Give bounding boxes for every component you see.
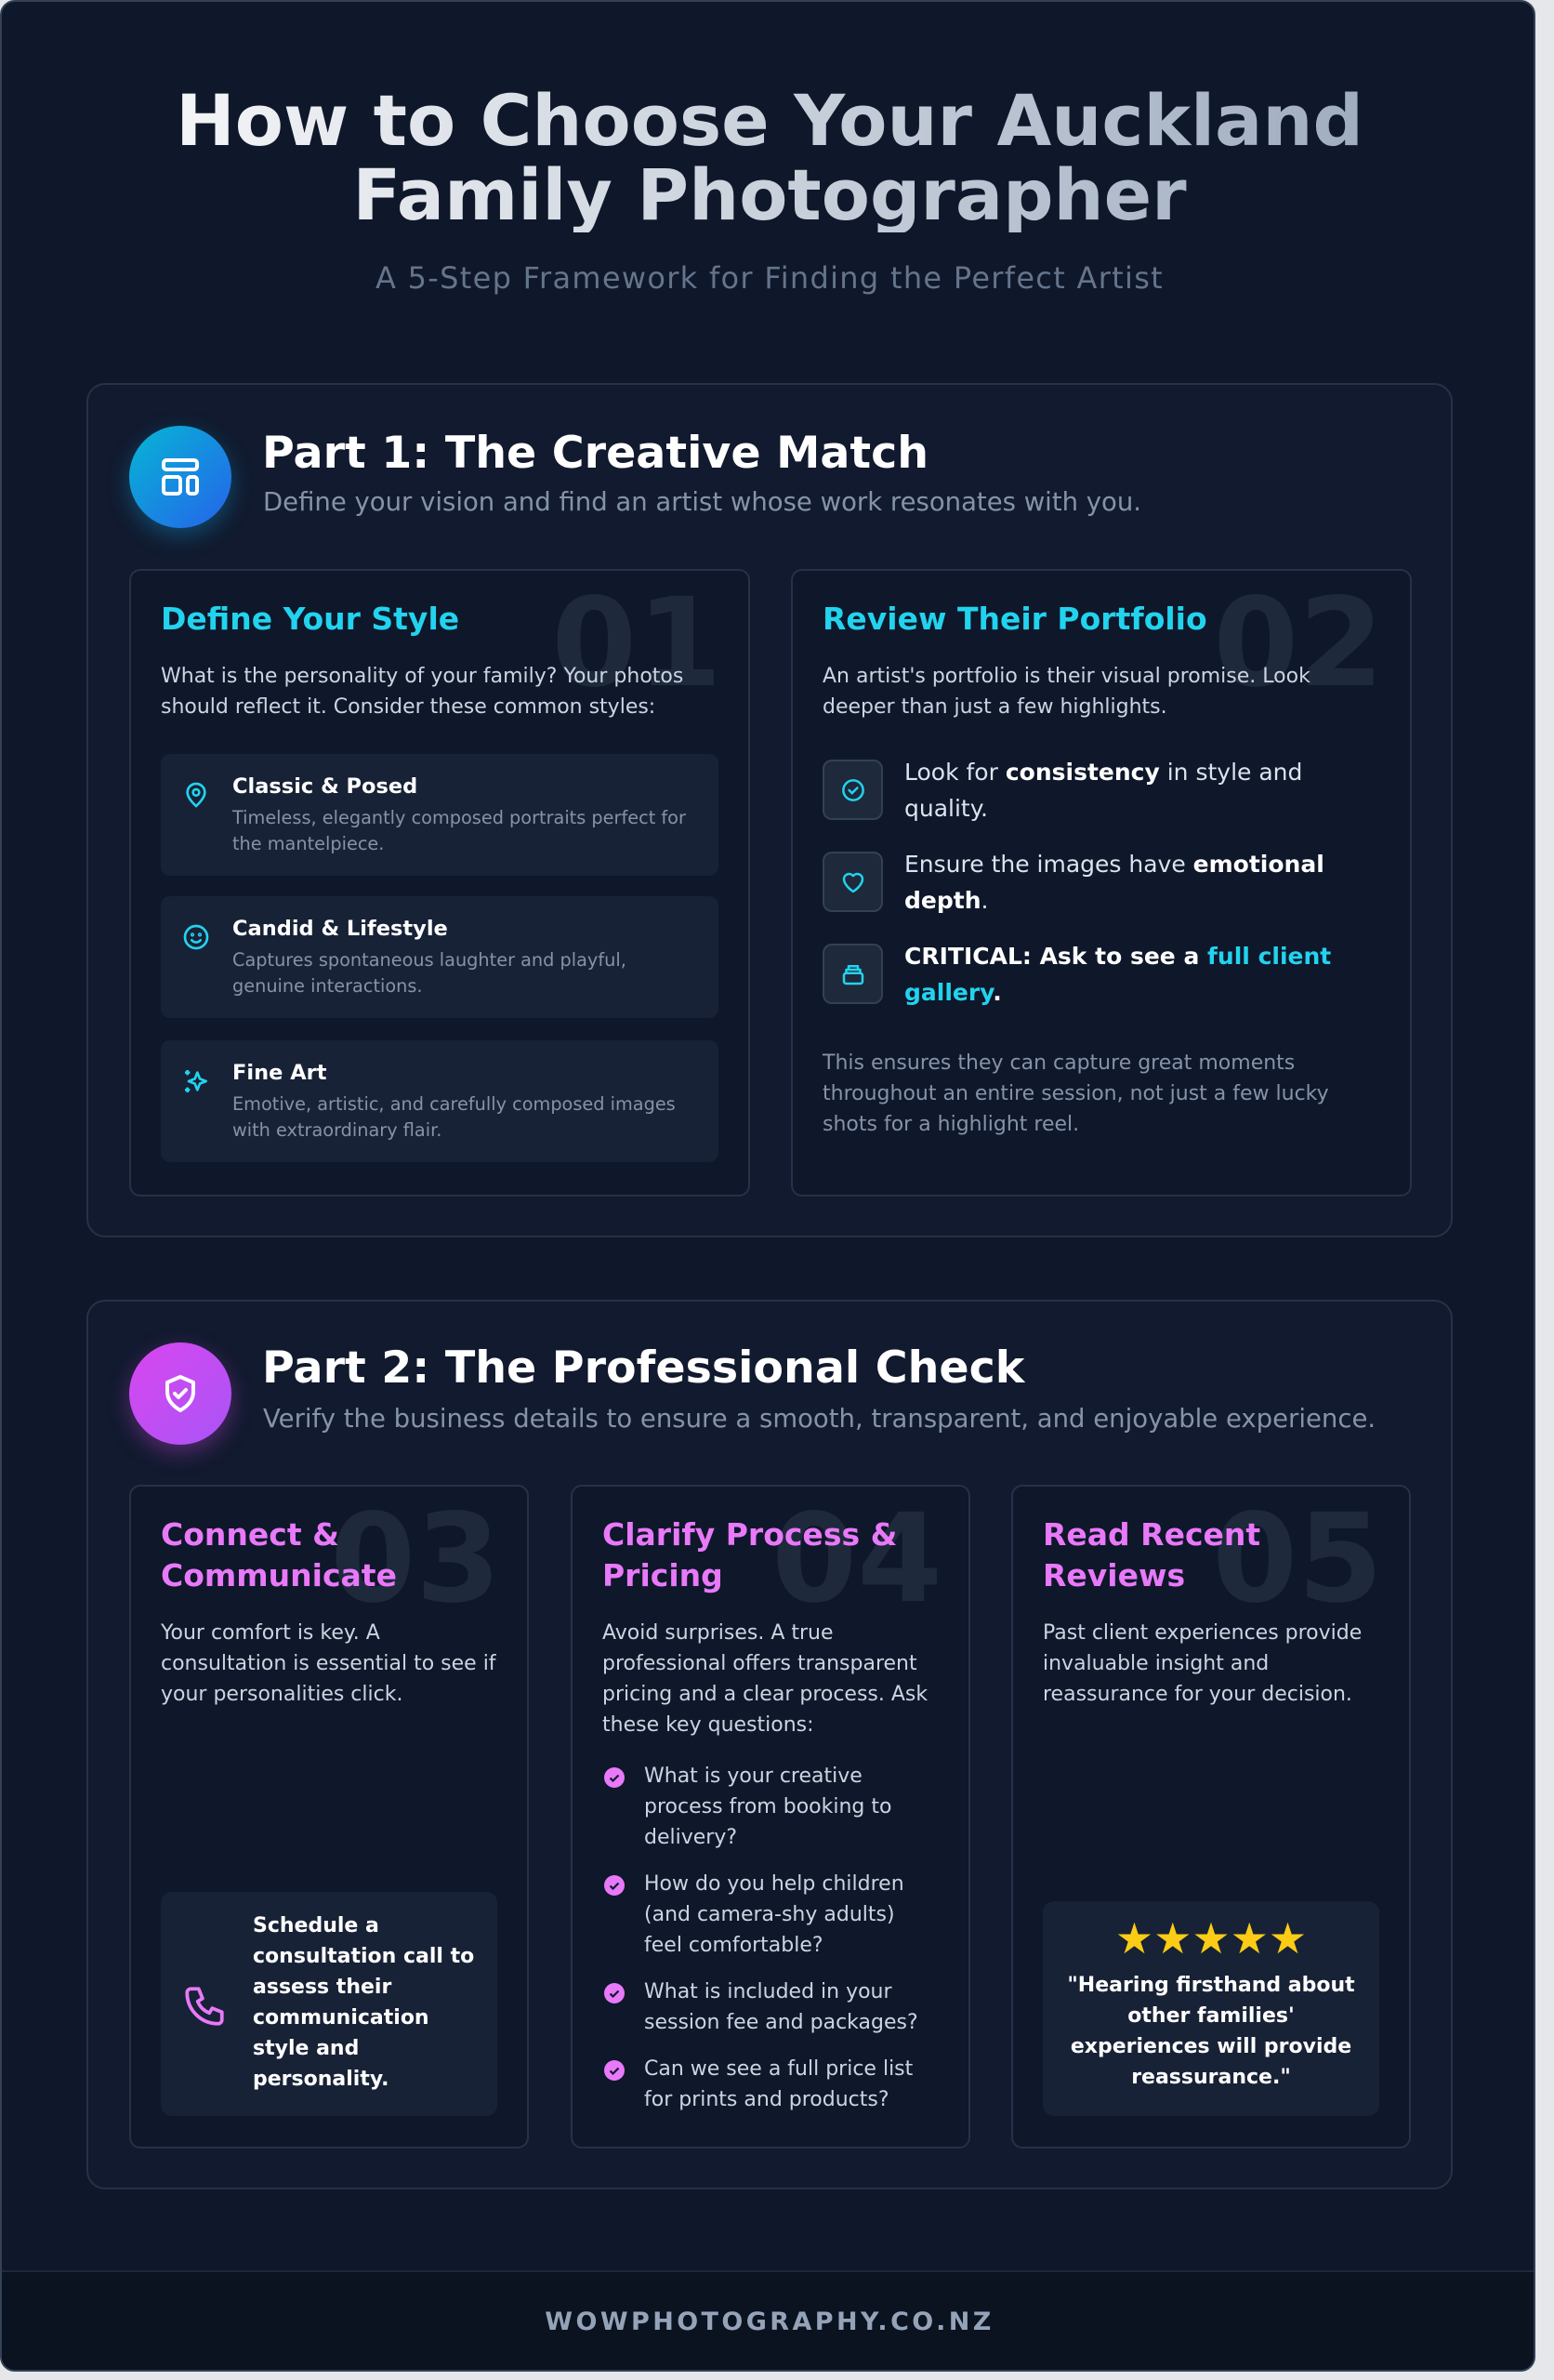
- card text: pricing and a clear process. Ask: [602, 1683, 928, 1706]
- icon: layout: [129, 426, 231, 528]
- card title: Define Your Style: [161, 601, 459, 637]
- heading: part 2: Part 2: The Professional Check: [262, 1342, 1024, 1394]
- row: consistency: quality.: [904, 795, 988, 822]
- card text: your personalities click.: [161, 1683, 402, 1706]
- question list: What is your creative: [644, 1765, 863, 1788]
- card: review portfolio: [791, 569, 1412, 1197]
- card title: Reviews: [1043, 1557, 1185, 1593]
- number 03: 03: [330, 1488, 501, 1631]
- card text: reassurance for your decision.: [1043, 1683, 1352, 1706]
- card title: Pricing: [602, 1557, 723, 1593]
- callout: testimonial: other families': [1127, 2004, 1295, 2028]
- number 05: 05: [1212, 1488, 1383, 1631]
- card title: Clarify Process &: [602, 1516, 897, 1553]
- question list: session fee and packages?: [644, 2011, 918, 2034]
- row: full gallery: gallery.: [904, 979, 1002, 1006]
- row: emotional depth: depth.: [904, 887, 988, 914]
- panel: part 1: [86, 383, 1453, 1237]
- callout: schedule: personality.: [253, 2068, 389, 2091]
- callout: schedule: communication: [253, 2006, 429, 2030]
- callout: schedule: [161, 1892, 497, 2116]
- callout: schedule: Schedule a: [253, 1914, 379, 1937]
- question list: (and camera-shy adults): [644, 1903, 895, 1926]
- question list: How do you help children: [644, 1872, 904, 1896]
- row: full gallery: [823, 943, 1331, 1006]
- card text: consultation is essential to see if: [161, 1652, 496, 1675]
- card text: Avoid surprises. A true: [602, 1621, 834, 1645]
- panel: part 2: [86, 1300, 1453, 2189]
- row: consistency: [823, 759, 1302, 822]
- card title: Review Their Portfolio: [823, 601, 1207, 637]
- footnote: [822, 1051, 1329, 1136]
- title: Family Photographer: [352, 153, 1187, 236]
- callout: testimonial: reassurance.": [1131, 2066, 1291, 2089]
- row: full gallery: CRITICAL: Ask to see a full client: [904, 943, 1331, 970]
- row: consistency: Look for consistency in style and: [904, 759, 1302, 786]
- row: emotional depth: [823, 851, 1324, 914]
- card text: An artist's portfolio is their visual promise. Look: [823, 665, 1310, 688]
- item: classic: [161, 754, 718, 876]
- question list: delivery?: [644, 1826, 737, 1849]
- card text: [161, 1621, 496, 1706]
- subheading: part 1: Define your vision and find an artist whose work resonates with you.: [263, 487, 1141, 517]
- question list: feel comfortable?: [644, 1934, 823, 1957]
- card text: professional offers transparent: [602, 1652, 917, 1675]
- card: pricing: [571, 1485, 970, 2149]
- subtitle: A 5-Step Framework for Finding the Perfect Artist: [375, 260, 1164, 296]
- item: candid: [161, 896, 718, 1018]
- card title: [1043, 1516, 1260, 1593]
- card title: Connect &: [161, 1516, 339, 1553]
- callout: schedule: style and: [253, 2037, 359, 2060]
- callout: testimonial: "Hearing firsthand about: [1067, 1974, 1355, 1997]
- icon: stars: ★★★★★: [1115, 1913, 1307, 1964]
- footer: WOWPHOTOGRAPHY.CO.NZ: [545, 2307, 994, 2336]
- question list: What is included in your: [644, 1980, 892, 2003]
- footer: [2, 2270, 1537, 2373]
- callout: schedule: consultation call to: [253, 1945, 474, 1968]
- callout: testimonial: [1043, 1901, 1379, 2116]
- card title: Communicate: [161, 1557, 397, 1593]
- item: fine art: with extraordinary flair.: [232, 1119, 441, 1141]
- footnote: shots for a highlight reel.: [823, 1113, 1079, 1136]
- question list: for prints and products?: [644, 2088, 889, 2111]
- card: reviews: [1011, 1485, 1411, 2149]
- question list: Can we see a full price list: [644, 2057, 913, 2081]
- card text: these key questions:: [602, 1713, 814, 1737]
- number 02: 02: [1213, 572, 1384, 715]
- item: fine art: Fine Art: [232, 1061, 326, 1085]
- question list: [604, 1765, 918, 2111]
- number 01: 01: [551, 572, 722, 715]
- row: emotional depth: Ensure the images have emotional: [904, 851, 1324, 878]
- card text: [1043, 1621, 1362, 1706]
- card title: [602, 1516, 897, 1593]
- item: candid: Captures spontaneous laughter and playful,: [232, 949, 626, 971]
- card text: should reflect it. Consider these common styles:: [161, 695, 655, 719]
- card title: Read Recent: [1043, 1516, 1260, 1553]
- number 04: 04: [771, 1488, 942, 1631]
- card text: deeper than just a few highlights.: [823, 695, 1167, 719]
- footnote: throughout an entire session, not just a few lucky: [823, 1082, 1329, 1105]
- item: fine art: [161, 1040, 718, 1162]
- card text: Your comfort is key. A: [161, 1621, 380, 1645]
- icon: shield: [129, 1342, 231, 1445]
- subheading: part 2: Verify the business details to ensure a smooth, transparent, and enjoyable experience.: [263, 1404, 1376, 1434]
- item: fine art: Emotive, artistic, and carefully composed images: [232, 1093, 676, 1115]
- callout: schedule: assess their: [253, 1976, 391, 1999]
- card title: [161, 1516, 397, 1593]
- card text: [823, 665, 1310, 719]
- question list: process from booking to: [644, 1795, 891, 1818]
- card: connect: [129, 1485, 529, 2149]
- title: [2, 84, 1537, 232]
- card text: invaluable insight and: [1043, 1652, 1269, 1675]
- item: classic: Classic & Posed: [232, 774, 417, 799]
- item: candid: Candid & Lifestyle: [232, 917, 448, 941]
- card text: Past client experiences provide: [1043, 1621, 1362, 1645]
- item: candid: genuine interactions.: [232, 975, 423, 997]
- card text: [161, 665, 683, 719]
- callout: testimonial: experiences will provide: [1071, 2035, 1351, 2058]
- card: define your style: [129, 569, 750, 1197]
- item: classic: Timeless, elegantly composed portraits perfect for: [232, 807, 686, 828]
- title: How to Choose Your Auckland: [176, 79, 1363, 162]
- item: classic: the mantelpiece.: [232, 833, 384, 854]
- heading: part 1: Part 1: The Creative Match: [262, 428, 928, 479]
- card text: [602, 1621, 928, 1737]
- card text: What is the personality of your family? Your photos: [161, 665, 683, 688]
- footnote: This ensures they can capture great moments: [823, 1051, 1295, 1075]
